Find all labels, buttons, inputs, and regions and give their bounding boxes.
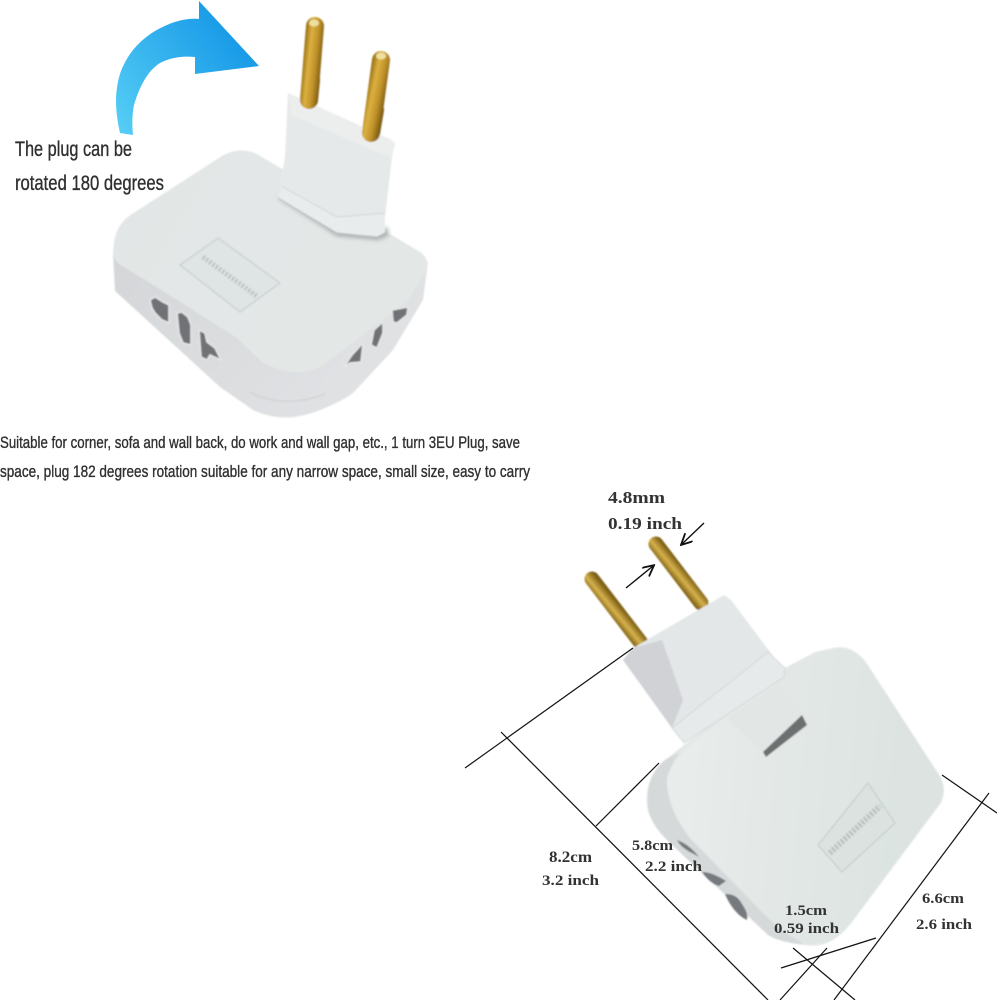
dimension label: total length: 3.2 inch (542, 873, 600, 889)
dimension label: width: 6.6cm (922, 891, 965, 907)
pin left over body (309, 80, 311, 100)
socket: front left (150, 297, 221, 360)
dimension label: body length (632, 838, 703, 875)
plug shadow on adapter (278, 195, 388, 240)
adapter body silhouette (647, 647, 944, 946)
embossed label (818, 783, 895, 872)
dimension label: width (916, 891, 973, 933)
adapter top face (667, 649, 943, 943)
upright plug pin left (309, 20, 319, 100)
dimension label: total length (542, 849, 600, 889)
caption: product description: space, plug 182 degrees rotation suitable for any narrow space, small size, easy to carry (0, 462, 530, 481)
side sockets (677, 840, 747, 920)
dimension label: thickness (774, 903, 840, 937)
socket: front right (344, 307, 408, 367)
rotation arrow icon (116, 1, 259, 135)
adapter seam line (250, 392, 325, 401)
arrow: pin width right (682, 523, 704, 544)
plug pin left (592, 579, 641, 643)
caption: product description: Suitable for corner, sofa and wall back, do work and wall gap, etc., 1 turn 3EU Plug, save (0, 433, 520, 452)
adapter top face (113, 150, 427, 372)
adapter side wall (648, 752, 805, 945)
dimension label: pin diameter: 0.19 inch (608, 514, 683, 533)
dimension lines (465, 648, 997, 1000)
upright plug body (278, 93, 395, 237)
dimension label: thickness: 0.59 inch (774, 921, 840, 937)
embossed label (180, 238, 280, 312)
product photo: adapter with dimensions (592, 544, 944, 946)
caption: plug rotation: rotated 180 degrees (15, 172, 164, 195)
dimension label: body length: 5.8cm (632, 838, 674, 854)
caption: plug rotation (15, 138, 164, 195)
plug pin right (656, 544, 701, 603)
arrow: pin width left (626, 566, 653, 588)
dimension label: body length: 2.2 inch (645, 859, 703, 875)
dimension label: pin diameter: 4.8mm (608, 488, 665, 507)
plug hinge neck (727, 683, 807, 757)
product photo: adapter with upright plug (113, 20, 428, 417)
dimension label: width: 2.6 inch (916, 917, 973, 933)
dimension label: total length: 8.2cm (549, 849, 593, 866)
upright plug pin right (371, 52, 386, 133)
dimension label: pin diameter (608, 488, 683, 533)
adapter side wall (113, 253, 428, 417)
pin right over body (371, 110, 375, 133)
caption: product description (0, 433, 530, 481)
caption: plug rotation: The plug can be (15, 138, 132, 161)
plug body (623, 595, 785, 743)
dimension label: thickness: 1.5cm (785, 903, 828, 919)
